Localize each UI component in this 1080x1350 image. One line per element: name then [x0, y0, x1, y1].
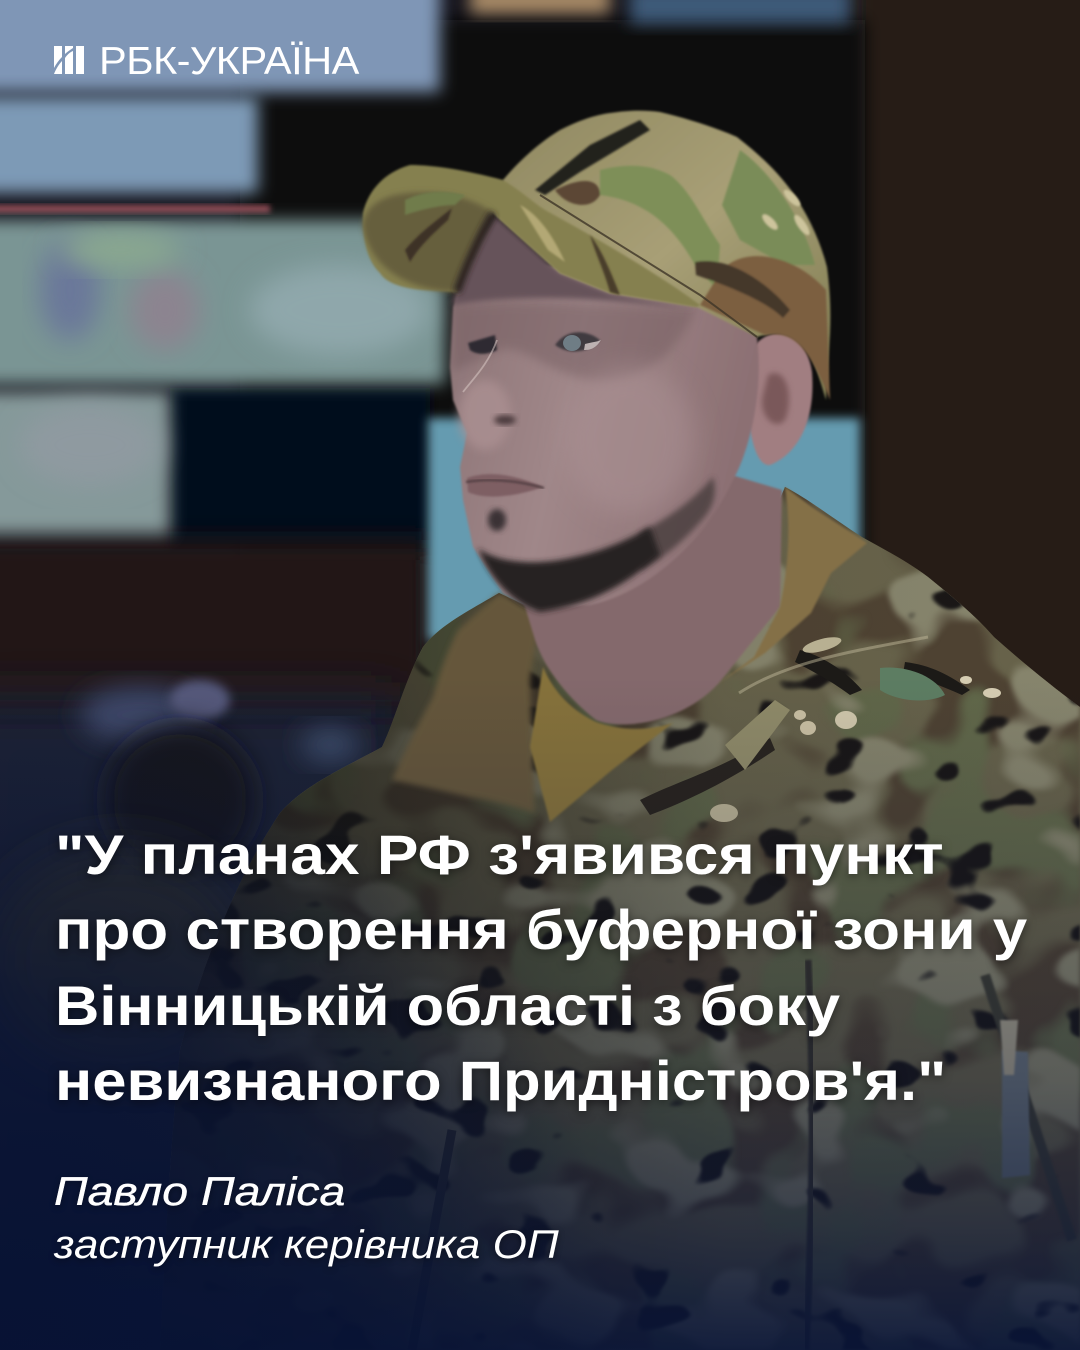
quote heading: невизнаного Придністров'я." — [55, 1049, 946, 1112]
author name: Павло Паліса — [54, 1170, 345, 1214]
neck — [520, 470, 782, 724]
zippers and pocket tag — [432, 959, 1052, 1310]
dim figures at lower left — [0, 680, 400, 1350]
quote heading: Вінницькій області з боку — [55, 974, 840, 1037]
cap crown — [493, 111, 830, 400]
quote heading: "У планах РФ з'явився пункт — [55, 823, 944, 886]
cap brim — [363, 165, 700, 307]
facial features — [452, 215, 697, 531]
logo wordmark: РБК-УКРАЇНА — [99, 40, 359, 83]
logo: RBC-Ukraine — [54, 40, 360, 83]
quote heading — [55, 823, 1028, 1114]
beard — [478, 477, 715, 612]
jacket — [150, 480, 1080, 1350]
t-shirt — [530, 667, 673, 822]
camouflage cap — [363, 111, 830, 400]
logo mark — [54, 46, 84, 74]
left hood, tan fabric — [392, 593, 540, 813]
quote heading: про створення буферної зони у — [55, 898, 1027, 961]
blurred screens — [0, 0, 860, 640]
author role: заступник керівника ОП — [54, 1223, 559, 1267]
right collar, tan — [719, 487, 867, 683]
cap camo patches — [405, 120, 830, 400]
camo details — [640, 634, 1001, 822]
face — [450, 260, 759, 610]
ear — [747, 333, 812, 465]
author attribution — [54, 1170, 559, 1267]
